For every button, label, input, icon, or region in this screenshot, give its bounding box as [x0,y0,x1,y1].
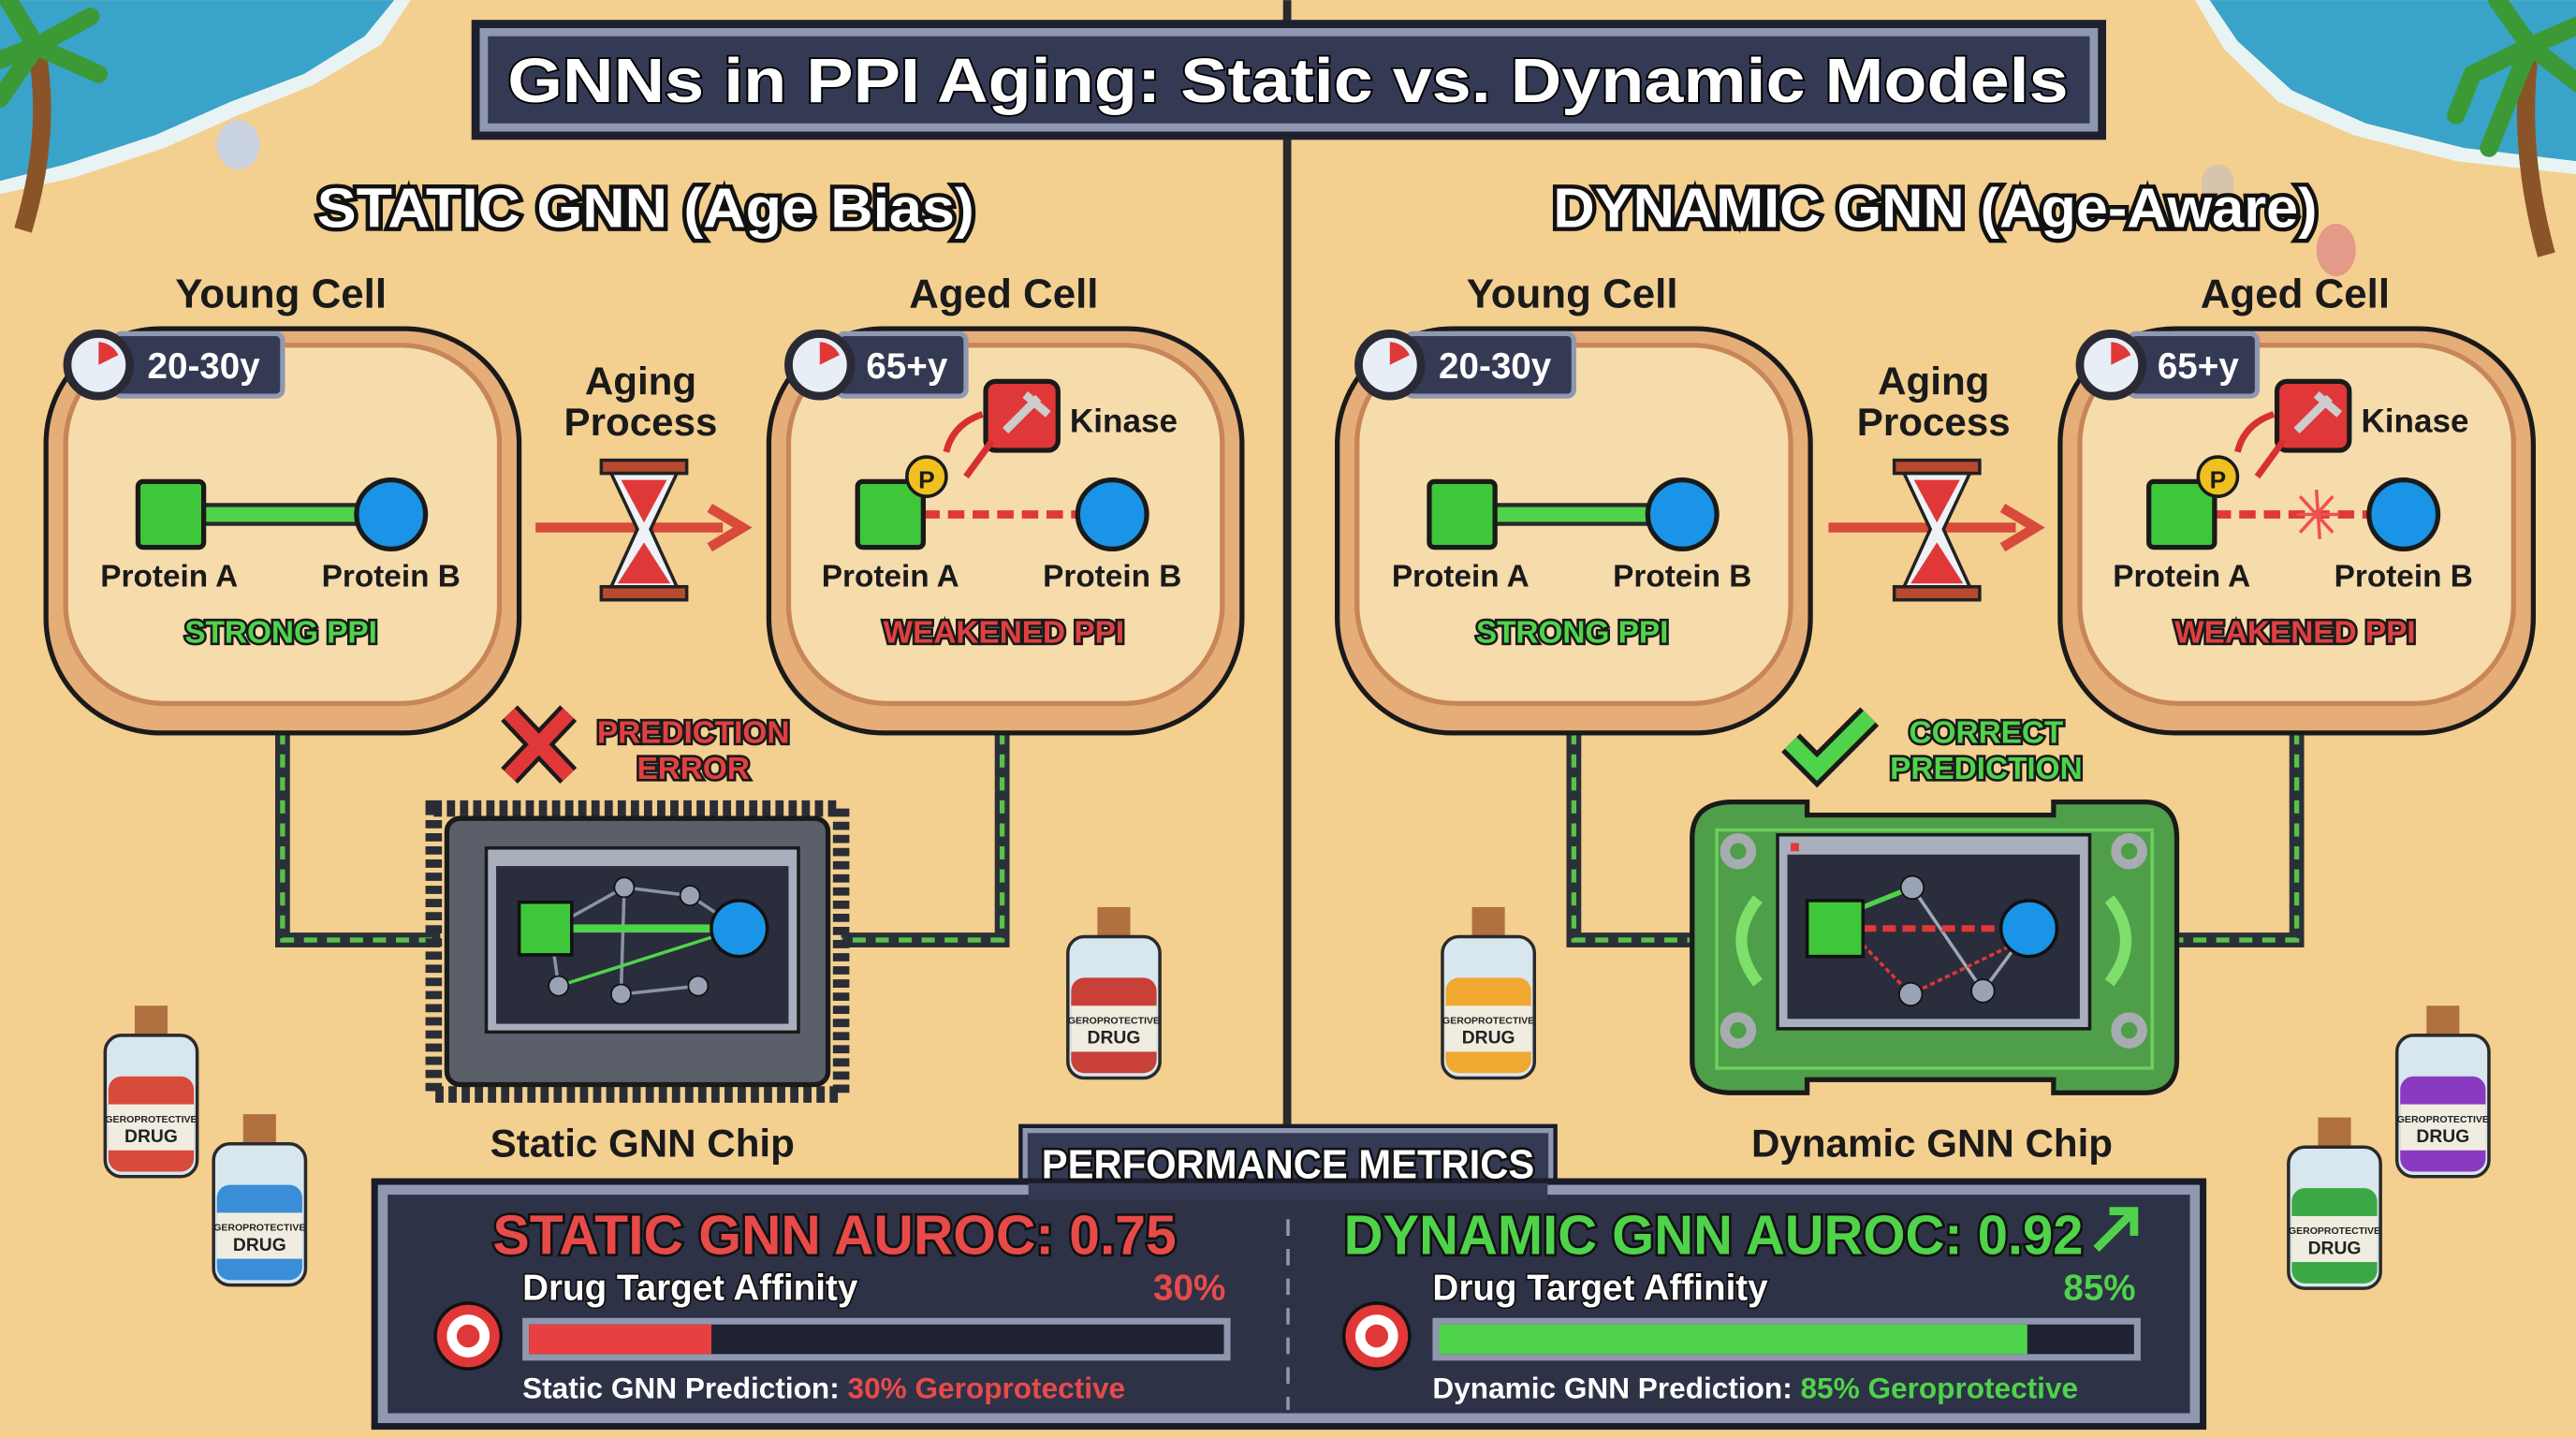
panel: static young cell: Protein A [100,560,238,594]
panel: dynamic young cell: Protein B [1613,560,1751,594]
bottle: right purple: GEROPROTECTIVE [2397,1114,2489,1125]
panel: dynamic young cell: STRONG PPI [1476,615,1668,650]
arrow: aging process left: Aging [585,359,696,403]
panel: dynamic aged cell: Protein A [2113,560,2250,594]
panel: static young cell: Young Cell [175,271,387,316]
panel: static aged cell: Kinase [1070,404,1178,440]
panel: dynamic young cell: 20-30y [1439,346,1552,387]
arrow: aging process left: Process [564,400,717,444]
bottle: left red: DRUG [124,1127,178,1147]
static GNN chip [433,809,842,1166]
connectors left [283,731,1003,940]
title [472,20,2106,139]
bottle: center orange [1442,907,1534,1078]
bottle: right purple: DRUG [2416,1127,2469,1147]
panel: dynamic aged cell: Kinase [2361,404,2469,440]
bottle: center red [1068,907,1160,1078]
metric: dynamic: DYNAMIC GNN AUROC: 0.92 [1344,1203,2083,1266]
panel: dynamic young cell [1338,271,1810,733]
palm tree left [0,0,98,230]
metric: dynamic: Dynamic GNN Prediction: 85% Geroprotective [1432,1372,2078,1405]
panel: dynamic young cell: Young Cell [1467,271,1678,316]
callout: prediction error: ERROR [637,752,750,786]
heading: dynamic: DYNAMIC GNN (Age-Aware) [1553,176,2318,239]
title: GNNs in PPI Aging: Static vs. Dynamic Models [507,47,2069,116]
panel: static aged cell: P [918,465,935,493]
bottle: center orange: DRUG [1462,1029,1515,1049]
metric: static: Drug Target Affinity [522,1268,858,1308]
bottle: center orange: GEROPROTECTIVE [1442,1016,1534,1027]
bottle: left red: GEROPROTECTIVE [105,1114,198,1125]
bottle: center red: GEROPROTECTIVE [1068,1016,1160,1027]
sea top-left [0,0,411,194]
panel: dynamic aged cell: Aged Cell [2201,271,2390,316]
dynamic GNN chip [1692,802,2177,1166]
palm tree right [2456,0,2576,255]
panel: performance metrics: PERFORMANCE METRICS [1042,1142,1534,1188]
panel: dynamic aged cell: 65+y [2158,346,2239,387]
panel: static aged cell: 65+y [866,346,948,387]
metric: dynamic: 85% [2063,1268,2136,1308]
bottle: right green [2289,1118,2380,1288]
panel: dynamic young cell: Protein A [1392,560,1530,594]
sea top-right [2195,0,2576,174]
panel: static young cell: Protein B [322,560,461,594]
callout: prediction error: PREDICTION [597,715,789,750]
callout: correct prediction: CORRECT [1910,715,2063,750]
arrow: aging process right: Process [1857,400,2011,444]
bottle: left blue: DRUG [233,1236,286,1255]
connectors right [1573,731,2297,940]
panel: static aged cell: Aged Cell [909,271,1099,316]
callout: correct prediction: PREDICTION [1890,752,2083,786]
callout: correct prediction [1791,715,2083,786]
metric: dynamic [1344,1203,2141,1405]
metric: static [435,1203,1231,1405]
panel: static young cell: 20-30y [148,346,260,387]
bottle: left blue: GEROPROTECTIVE [213,1223,305,1234]
panel: static young cell [46,271,520,733]
callout: prediction error [509,713,789,786]
metric: dynamic: Drug Target Affinity [1432,1268,1768,1308]
panel: performance metrics [372,1124,2206,1430]
metric: static: STATIC GNN AUROC: 0.75 [493,1203,1177,1266]
panel: static young cell: STRONG PPI [184,615,377,650]
metric: static: Static GNN Prediction: 30% Geroprotective [522,1372,1125,1405]
arrow: aging process right [1828,359,2036,600]
heading: static: STATIC GNN (Age Bias) [317,176,974,239]
panel: static aged cell [768,271,1242,733]
panel: dynamic aged cell: WEAKENED PPI [2174,615,2416,650]
panel: static aged cell: Protein B [1043,560,1181,594]
panel: static aged cell: WEAKENED PPI [884,615,1124,650]
metric: static: 30% [1153,1268,1225,1308]
arrow: aging process right: Aging [1878,359,1989,403]
panel: static aged cell: Protein A [822,560,959,594]
shells [217,120,2356,276]
panel: dynamic aged cell: P [2210,465,2226,493]
bottle: right purple [2397,1005,2489,1177]
static GNN chip: Static GNN Chip [490,1122,795,1166]
dynamic GNN chip: Dynamic GNN Chip [1751,1122,2113,1166]
arrow: aging process left [535,359,742,600]
bottle: right green: GEROPROTECTIVE [2289,1225,2380,1237]
bottle: left red [105,1005,198,1177]
panel: dynamic aged cell [2060,271,2533,733]
panel: dynamic aged cell: Protein B [2334,560,2473,594]
center divider [1283,0,1292,1134]
bottle: center red: DRUG [1088,1029,1140,1049]
bottle: left blue [213,1114,305,1285]
bottle: right green: DRUG [2308,1239,2361,1258]
